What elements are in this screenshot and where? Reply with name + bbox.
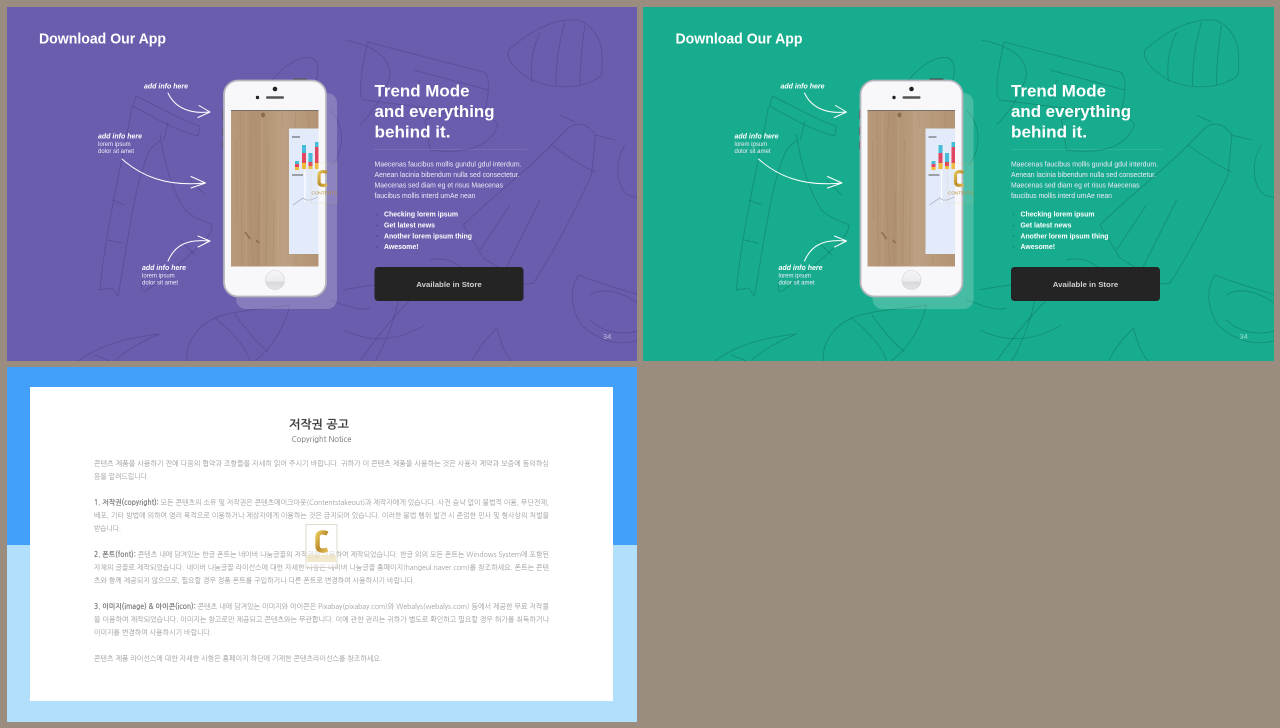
callout: add info here bottom: add info here [778,265,823,272]
text block: description: Maecenas faucibus mollis gundul gdul interdum. [1011,162,1158,168]
text block: description: faucibus mollis interd umAe nean [1011,193,1112,200]
heading: Trend Mode: Trend Mode [374,82,470,100]
callout: add info here top [780,84,846,118]
phone body [224,80,326,296]
button: Available in Store [374,267,524,301]
chart sheet on screen [289,128,318,254]
phone screen: wood texture [868,110,955,266]
heading: Trend Mode: Trend Mode [1011,82,1106,100]
callout: add info here bottom: lorem ipsum [778,274,811,280]
list: features: Another lorem ipsum thing [1020,234,1108,240]
watermark: gold C logo box [306,524,337,568]
phone body [860,80,962,296]
watermark: gold C logo [948,163,974,203]
callout: add info here middle: add info here [98,134,142,140]
arrow: middle callout [758,159,842,188]
text block: description [1011,162,1158,200]
heading: Download Our App: Download Our App [676,30,802,48]
heading: copyright notice title: Copyright Notice [292,435,352,444]
divider [374,148,527,151]
text block: clause 3 image and icon: 이미지를 변경하여 사용하시기 바랍니다. [94,628,212,637]
text block: description: Maecenas faucibus mollis gundul gdul interdum. [374,162,522,168]
text block: description: Aenean lacinia bibendum nulla sed consectetur. [374,172,520,179]
translucent backing card behind phone [236,93,337,309]
background line drawings of clothing [78,20,640,361]
phone screen: wood texture [231,110,318,266]
callout: add info here middle [734,134,842,188]
text block: clause 3 image and icon [94,602,549,637]
page number: 34 [1240,332,1248,341]
arrow: middle callout [122,159,206,188]
callout: add info here middle: lorem ipsum [734,142,767,148]
camera and speaker [892,87,920,99]
list: features: Get latest news [1020,222,1072,230]
divider [1010,148,1164,151]
background upper blue band [7,367,637,545]
slide background purple [7,7,637,361]
heading: Trend Mode: and everything [374,102,494,121]
heading: Download Our App: Download Our App [39,30,166,48]
callout: add info here bottom [142,236,210,286]
button: Available in Store: Available in Store [416,280,482,289]
callout: add info here top: add info here [780,84,825,90]
callout: add info here middle: dolor sit amet [734,149,771,155]
text block: clause 1 copyright: 받습니다. [94,524,121,533]
text block: description: Maecenas sed diam eg et risus Maecenas [374,182,503,190]
text block: clause 1 copyright [94,498,549,533]
text block: clause 1 copyright: 1. 저작권(copyright): 모든 콘텐츠의 소유 및 저작권은 콘텐츠메이크아웃(Contentstakeout)과 제작자에게 있습니다. 사전 승낙 없이 불법적 이용, 무단전재, [94,498,549,507]
text block: license footer: 콘텐츠 제품 라이선스에 대한 자세한 사항은 홈페이지 하단에 기재한 콘텐츠라이선스를 참조하세요. [94,654,382,663]
list: features: Checking lorem ipsum [384,212,458,218]
callout: add info here bottom: dolor sit amet [142,280,178,286]
background line drawings of clothing [714,20,1276,361]
text block: clause 2 font: 2. 폰트(font): 콘텐츠 내에 담겨있는 한글 폰트는 네이버 나눔글꼴의 저작권을 이용하여 제작되었습니다. 한글 외의 모든 폰트는 Windows System에 포함된 [94,550,549,559]
white notice card [30,387,613,701]
watermark: gold C logo: CONTENTS [948,190,973,196]
text block: description: Maecenas sed diam eg et risus Maecenas [1011,182,1140,190]
list: features [376,212,472,251]
heading: Trend Mode: and everything [1011,102,1131,121]
heading: Trend Mode: behind it. [1011,122,1087,142]
text block: introduction: 콘텐츠 제품을 사용하기 전에 다음의 협약과 조항들을 자세히 읽어 주시기 바랍니다. 귀하가 이 콘텐츠 제품을 사용하는 것은 사용자 계약과 보증에 동의하심 [94,459,549,468]
text block: clause 1 copyright: 배포, 기타 방법에 의하여 영리 목적으로 이용하거나 제삼자에게 이용하는 것은 금지되어 있습니다. 이러한 불법 행위 발견 시 준엄한 민사 및 형사상의 처벌을 [94,511,549,520]
callout: add info here middle: lorem ipsum [98,142,131,148]
text block: description [374,162,522,200]
list: features: Get latest news [384,222,435,230]
camera and speaker [256,87,284,99]
callout: add info here bottom: add info here [142,265,186,272]
panel: purple app slide [7,7,640,361]
icon: smartphone mockup [859,78,962,296]
button: Available in Store [1011,267,1160,301]
callout: add info here bottom: dolor sit amet [778,280,815,286]
panel: copyright notice slide [7,367,637,722]
callout: add info here bottom [778,236,846,286]
callout: add info here middle [98,134,206,188]
slide background green [643,7,1274,361]
text block: clause 3 image and icon: 을 이용하여 제작되었습니다. 이미지는 참고로만 제공되고 콘텐츠와는 무관합니다. 이에 관한 권리는 귀하가 별도로 확인하고 필요할 경우 허가를 취득하거나 [94,615,549,624]
translucent backing card behind phone [872,93,974,309]
text block: description: Aenean lacinia bibendum nulla sed consectetur. [1011,172,1156,179]
arrow: bottom callout [168,236,210,261]
callout: add info here middle: dolor sit amet [98,149,134,155]
text block: clause 3 image and icon: 3. 이미지(image) & 아이콘(icon): 콘텐츠 내에 담겨있는 이미지와 아이콘은 Pixabay(pixabay.com)와 Webalys(webalys.com) 등에서 제공한 무료 저작물 [94,602,549,611]
home button [266,270,284,290]
callout: add info here middle: add info here [734,134,779,140]
text block: clause 2 font: 자체의 글꼴로 제작되었습니다. 네이버 나눔글꼴 라이선스에 대한 자세한 사항은 네이버 나눔글꼴 홈페이지(hangeul.naver.com)를 참조하세요. 폰트는 콘텐 [94,563,549,572]
list: features [1013,212,1108,251]
callout: add info here top: add info here [144,84,188,90]
arrow: top callout [168,93,210,118]
callout: add info here top [144,84,210,118]
page number: 34 [603,332,611,341]
list: features: Checking lorem ipsum [1020,212,1094,218]
button: Available in Store: Available in Store [1053,280,1118,289]
background lower light blue band [7,545,637,722]
text block: clause 2 font: 츠와 함께 제공되지 않으므로, 필요할 경우 정품 폰트를 구입하거나 다른 폰트로 변경하여 사용하시기 바랍니다. [94,576,415,585]
arrow: bottom callout [804,236,846,261]
arrow: top callout [804,93,846,118]
list: features: Another lorem ipsum thing [384,234,472,240]
list: features: Awesome! [384,244,418,251]
icon: smartphone mockup [222,78,326,296]
panel: green app slide [643,7,1276,361]
heading: Trend Mode [1011,82,1131,142]
phone side buttons [222,78,307,149]
heading: Trend Mode: behind it. [374,122,450,142]
heading: copyright notice title: 저작권 공고 [289,418,350,430]
watermark: gold C logo: CONTENTS [312,190,337,196]
heading: copyright notice title [289,418,352,444]
heading: Trend Mode [374,82,494,142]
text block: introduction [94,459,549,481]
chart sheet on screen [926,128,955,254]
home button [902,270,921,290]
phone side buttons [859,78,944,149]
callout: add info here bottom: lorem ipsum [142,274,175,280]
text block: clause 2 font [94,550,549,585]
text block: introduction: 음을 알려드립니다. [94,472,149,481]
watermark: gold C logo [311,163,337,203]
text block: description: faucibus mollis interd umAe nean [374,193,476,200]
list: features: Awesome! [1020,244,1055,251]
